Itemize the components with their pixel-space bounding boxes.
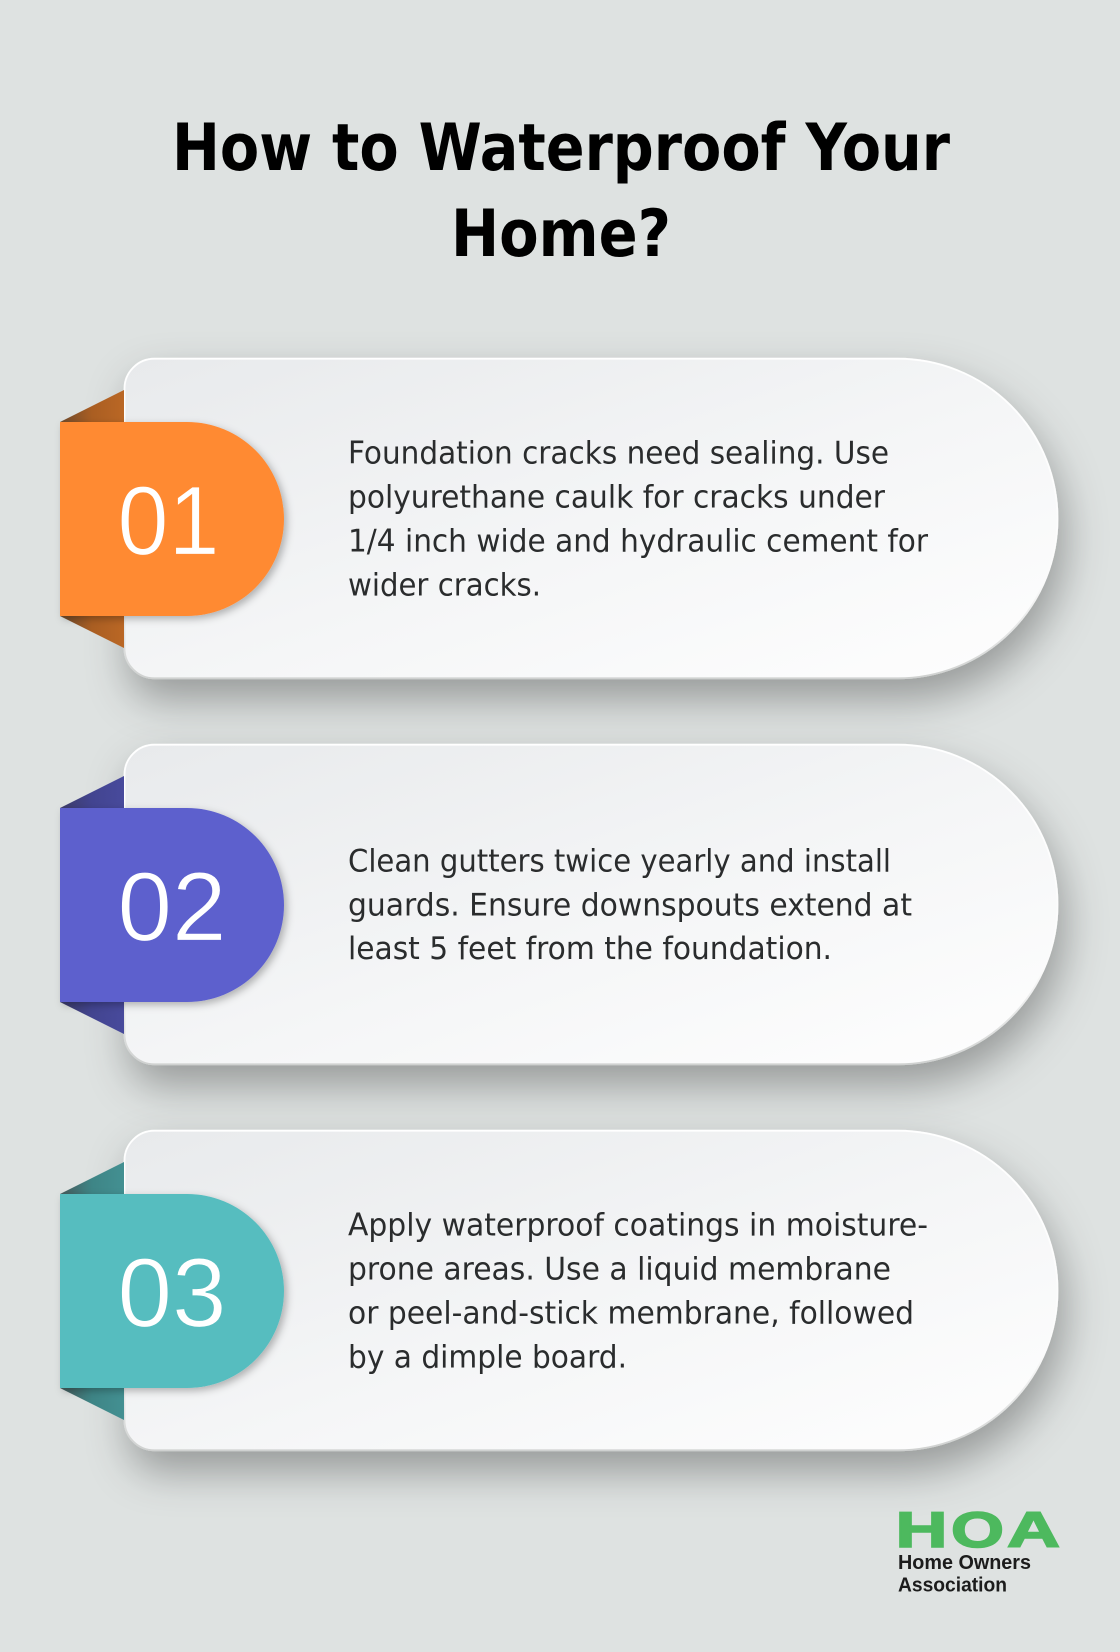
number 01: 01 bbox=[118, 466, 220, 576]
fold top 01 bbox=[60, 390, 124, 422]
title: Home? bbox=[451, 197, 671, 272]
text: step 01: Foundation cracks need sealing. Use bbox=[348, 435, 889, 471]
number tab 03 bbox=[60, 1194, 284, 1388]
logo letters HOA bbox=[896, 1502, 1060, 1558]
text: step 02: guards. Ensure downspouts extend at bbox=[348, 887, 912, 923]
text: step 02: Clean gutters twice yearly and install bbox=[348, 843, 891, 879]
text: step 02 bbox=[348, 843, 912, 967]
fold bottom 01 bbox=[60, 616, 124, 648]
fold bottom 02 bbox=[60, 1002, 124, 1034]
card 02 background bbox=[124, 745, 1058, 1064]
fold top 02 bbox=[60, 776, 124, 808]
text: step 03: Apply waterproof coatings in moisture- bbox=[348, 1207, 928, 1243]
fold top 03 bbox=[60, 1162, 124, 1194]
text: step 03 bbox=[348, 1207, 928, 1375]
text: step 01: wider cracks. bbox=[348, 567, 541, 603]
panel: step 01 bbox=[60, 359, 1058, 678]
logo caption: Association bbox=[898, 1574, 1007, 1596]
title bbox=[172, 111, 950, 272]
text: step 03: prone areas. Use a liquid membrane bbox=[348, 1251, 891, 1287]
text: step 01: polyurethane caulk for cracks under bbox=[348, 479, 885, 515]
logo letters HOA: O bbox=[951, 1502, 1004, 1558]
fold bottom 03 bbox=[60, 1388, 124, 1420]
text: step 01 bbox=[348, 435, 928, 603]
card 01 background bbox=[124, 359, 1058, 678]
text: step 03: or peel-and-stick membrane, followed bbox=[348, 1295, 914, 1331]
number tab 02 bbox=[60, 808, 284, 1002]
text: step 01: 1/4 inch wide and hydraulic cement for bbox=[348, 523, 928, 559]
logo caption: Home Owners bbox=[898, 1552, 1031, 1574]
text: step 02: least 5 feet from the foundation. bbox=[348, 931, 832, 967]
number tab 01 bbox=[60, 422, 284, 616]
logo: HOA Home Owners Association bbox=[896, 1502, 1060, 1596]
number 03: 03 bbox=[118, 1238, 227, 1348]
card 03 background bbox=[124, 1131, 1058, 1450]
logo letters HOA: H bbox=[896, 1502, 948, 1558]
panel: step 02 bbox=[60, 745, 1058, 1064]
logo letters HOA: A bbox=[1007, 1502, 1060, 1558]
logo caption bbox=[898, 1552, 1031, 1596]
title: How to Waterproof Your bbox=[172, 111, 950, 186]
number 02: 02 bbox=[118, 852, 227, 962]
panel: step 03 bbox=[60, 1131, 1058, 1450]
text: step 03: by a dimple board. bbox=[348, 1339, 627, 1375]
